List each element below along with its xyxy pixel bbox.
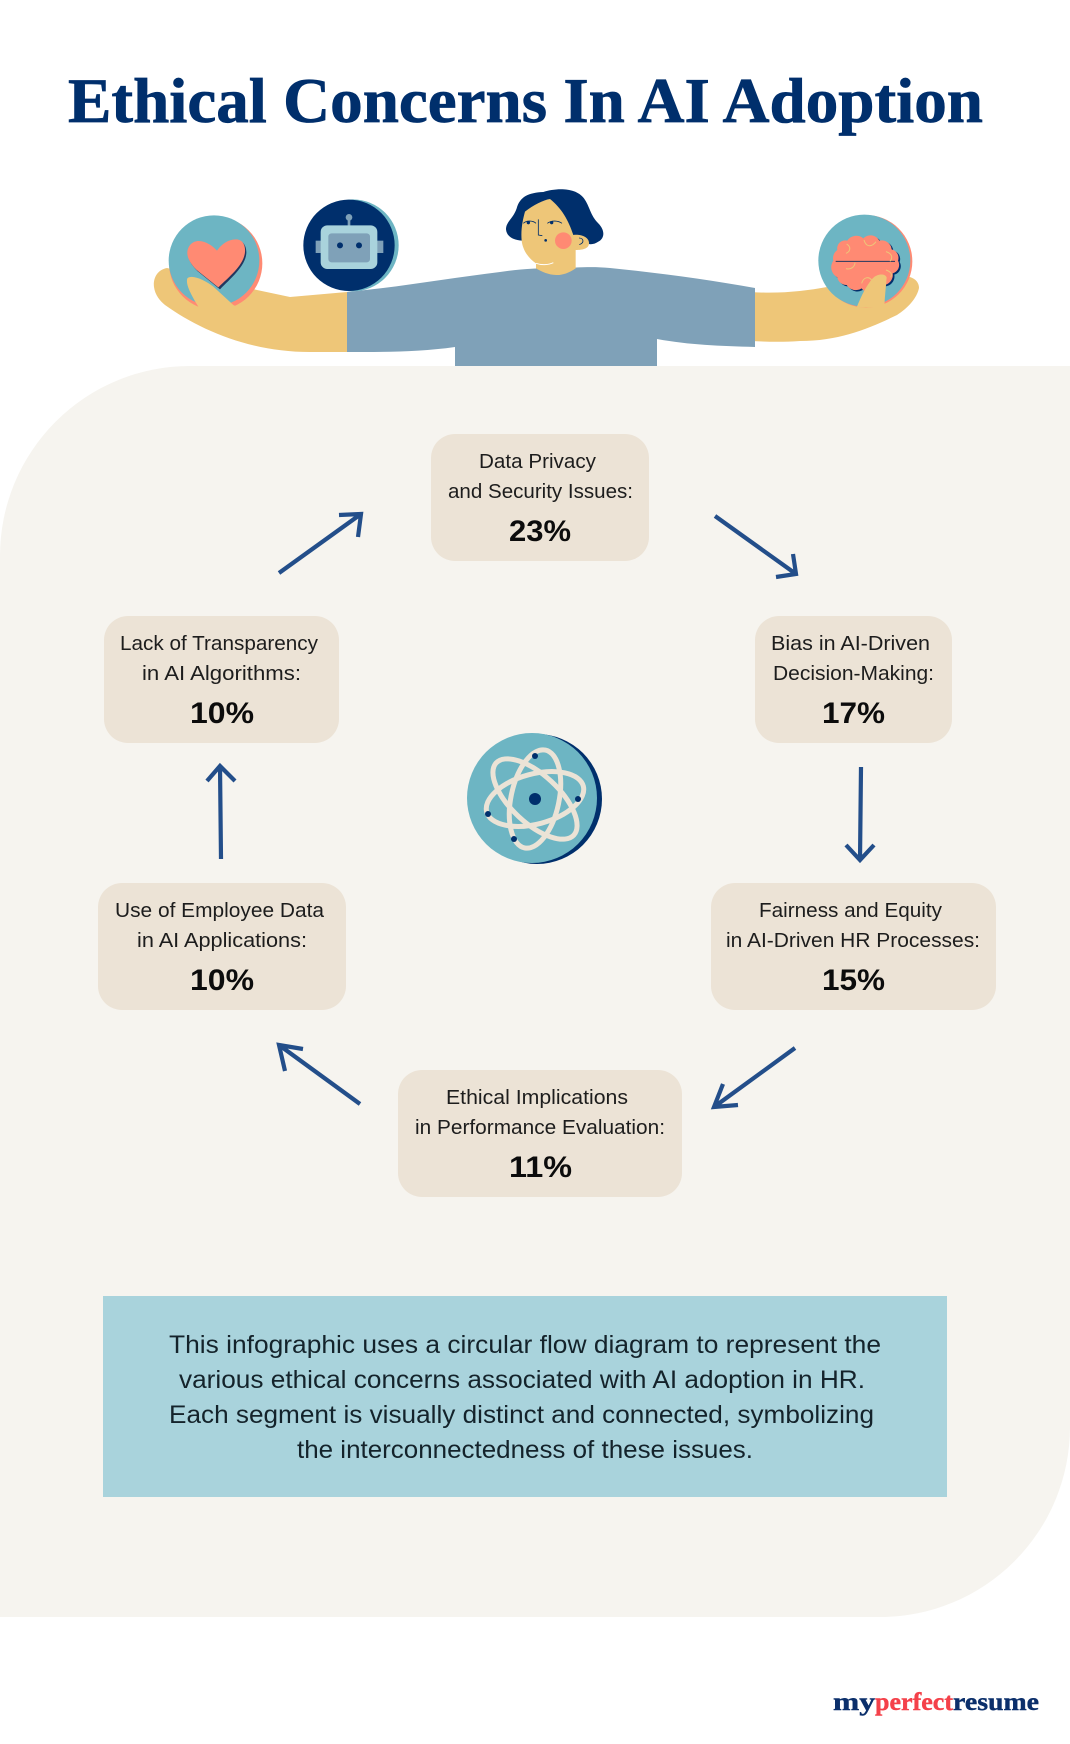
arrow: employee data to transparency [207,766,235,859]
box: employee data: Use of Employee Data [115,900,325,922]
arrow: fairness to ethical [714,1048,795,1107]
callout: description: This infographic uses a circular flow diagram to represent the [169,1331,881,1359]
right arm [750,277,919,342]
callout: description: Each segment is visually distinct and connected, symbolizing [169,1401,874,1429]
box: data privacy [431,434,649,561]
icon: brain ball [818,215,912,308]
arrow: transparency to privacy [279,514,361,573]
left arm [154,268,347,352]
box: transparency: Lack of Transparency [120,633,318,655]
title: Ethical Concerns In AI Adoption [68,66,983,136]
logo: resume [953,1689,1039,1716]
box: fairness: in AI-Driven HR Processes: [726,930,980,952]
shirt [347,267,755,366]
icon: robot ball [303,199,399,291]
box: fairness: 15% [822,964,885,997]
box: transparency: 10% [190,697,254,730]
callout: description: various ethical concerns associated with AI adoption in HR. [179,1366,865,1394]
logo: perfect [875,1689,954,1716]
box: ethical implications [398,1070,682,1197]
logo: my [833,1689,876,1716]
box: bias [755,616,952,743]
box: employee data: 10% [190,964,254,997]
person head [506,189,603,275]
illustration: person holding icons [154,189,919,366]
callout: description [103,1296,947,1497]
box: transparency: in AI Algorithms: [142,663,301,685]
box: data privacy: 23% [509,515,571,548]
box: bias: Bias in AI-Driven [771,633,930,655]
background panel [0,366,1070,1617]
box: transparency [104,616,339,743]
box: ethical implications: in Performance Evaluation: [415,1117,665,1139]
box: data privacy: Data Privacy [479,451,596,473]
icon: heart ball [169,215,263,320]
box: bias: 17% [822,697,885,730]
arrow: privacy to bias [715,516,796,577]
box: data privacy: and Security Issues: [448,481,633,503]
box: fairness: Fairness and Equity [759,900,942,922]
callout: description: the interconnectedness of these issues. [297,1436,753,1464]
arrow: ethical to employee data [279,1045,360,1104]
logo [833,1689,1039,1716]
icon: atom [467,733,602,864]
box: fairness [711,883,996,1010]
arrow: bias to fairness [846,767,874,860]
box: ethical implications: 11% [509,1151,572,1184]
box: employee data: in AI Applications: [137,930,307,952]
box: ethical implications: Ethical Implications [446,1087,628,1109]
box: bias: Decision-Making: [773,663,934,685]
box: employee data [98,883,346,1010]
